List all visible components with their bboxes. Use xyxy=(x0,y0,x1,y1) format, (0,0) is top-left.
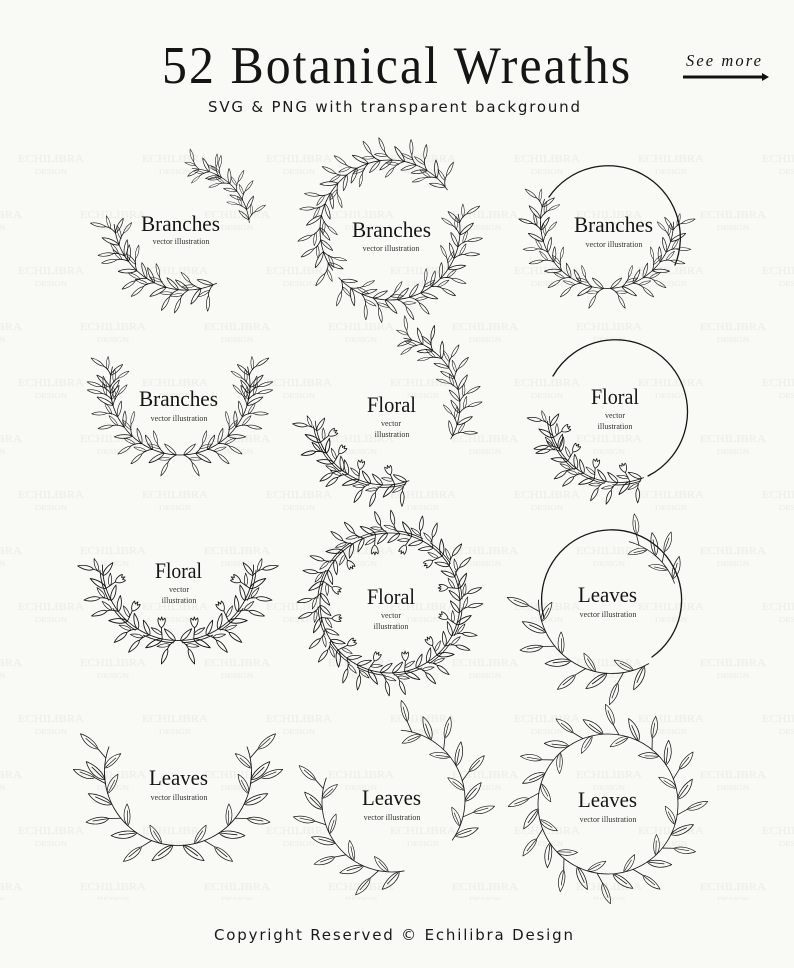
wreath 12: leaves full: Leaves xyxy=(578,787,637,812)
wreath 2: branches: Branches xyxy=(352,217,431,242)
wreath 10: leaves laurel: vector illustration xyxy=(151,793,207,802)
see more link: See more xyxy=(686,51,761,70)
wreath 10: leaves laurel xyxy=(70,726,286,864)
wreath 7: floral laurel xyxy=(64,542,292,665)
wreath 4: branches laurel: Branches xyxy=(139,386,218,411)
wreath 2: branches xyxy=(284,124,494,334)
wreath 7: floral laurel: illustration xyxy=(162,596,196,605)
wreath 7: floral laurel: vector xyxy=(169,585,189,594)
wreath 3: branches with circle: Branches xyxy=(574,212,653,237)
wreath 12: leaves full xyxy=(505,701,711,907)
wreath 8: floral full xyxy=(284,497,496,709)
wreath 6: floral with circle: illustration xyxy=(598,422,632,431)
wreath 5: floral: vector xyxy=(381,419,401,428)
wreath 8: floral full: vector xyxy=(381,611,401,620)
wreath 9: leaves with circle: vector illustration xyxy=(580,610,636,619)
wreath 5: floral: Floral xyxy=(367,392,416,417)
wreath 6: floral with circle: Floral xyxy=(591,384,639,409)
wreath 9: leaves with circle xyxy=(504,511,690,708)
wreath 4: branches laurel: vector illustration xyxy=(151,414,207,423)
wreath 1: branches xyxy=(77,138,268,327)
wreath 8: floral full: illustration xyxy=(374,622,408,631)
watermark pattern xyxy=(0,130,794,900)
subtitle: SVG & PNG with transparent background xyxy=(208,98,580,116)
wreath 5: floral xyxy=(280,303,495,519)
wreath 3: branches with circle: vector illustration xyxy=(586,240,642,249)
wreath 4: branches laurel xyxy=(73,345,287,477)
wreath 11: leaves: Leaves xyxy=(362,785,421,810)
wreath 12: leaves full: vector illustration xyxy=(580,815,636,824)
wreath 1: branches: vector illustration xyxy=(153,237,209,246)
wreath 11: leaves: vector illustration xyxy=(364,813,420,822)
wreath 11: leaves xyxy=(290,697,498,898)
title: 52 Botanical Wreaths xyxy=(162,37,630,95)
wreath 7: floral laurel: Floral xyxy=(155,558,202,583)
wreath 6: floral with circle: vector xyxy=(605,411,625,420)
wreath 1: branches: Branches xyxy=(141,211,220,236)
wreath 2: branches: vector illustration xyxy=(363,244,419,253)
arrow: see more xyxy=(683,73,769,81)
wreath 6: floral with circle xyxy=(515,340,687,517)
wreath 5: floral: illustration xyxy=(375,430,409,439)
wreath 10: leaves laurel: Leaves xyxy=(149,765,208,790)
copyright footer: Copyright Reserved © Echilibra Design xyxy=(214,926,573,944)
wreath 9: leaves with circle: Leaves xyxy=(578,582,637,607)
wreath 8: floral full: Floral xyxy=(367,584,415,609)
wreath 3: branches with circle xyxy=(506,166,708,310)
